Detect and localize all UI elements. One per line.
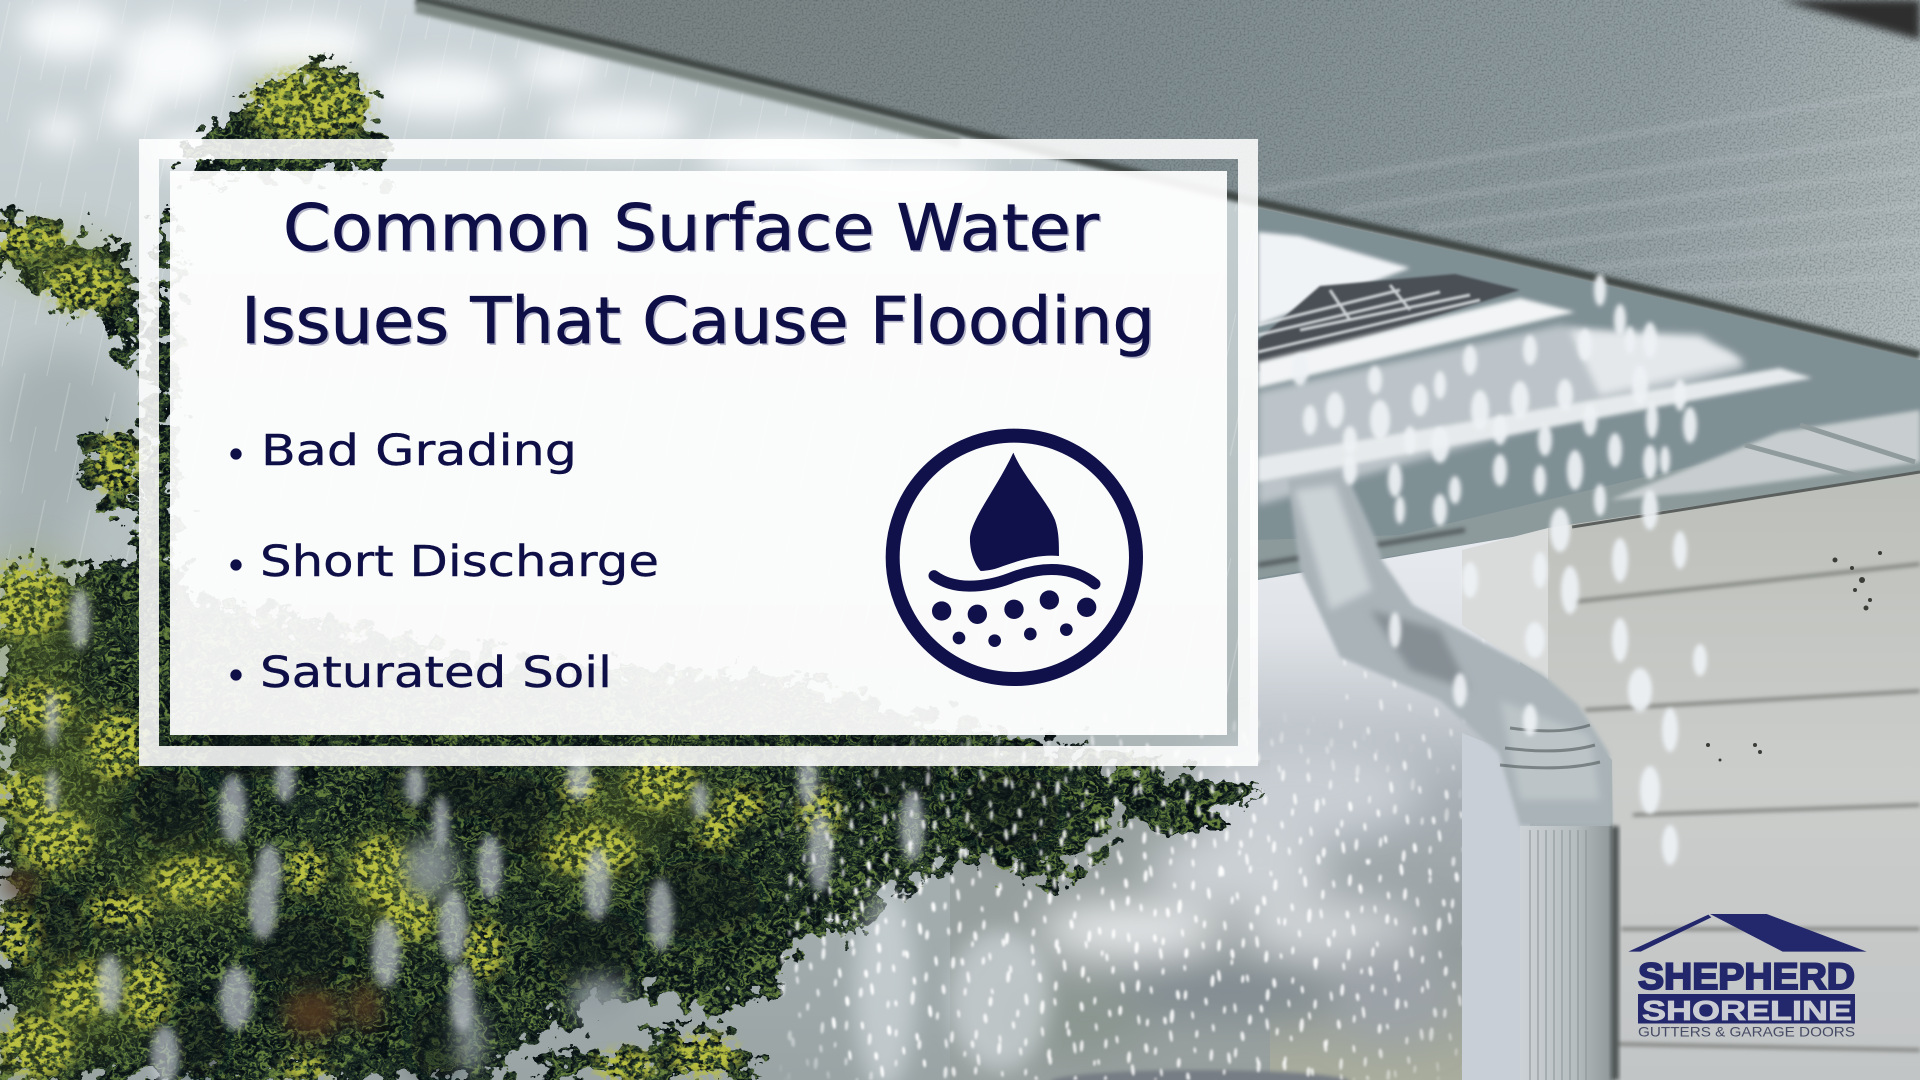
logo: Shepherd Shoreline Gutters & Garage Doors (1628, 914, 1867, 1040)
grey gaps and falling rain drops over the tree (46, 589, 924, 1080)
yard and distant mist below the gutter (950, 440, 1520, 1080)
logo wordmark (1638, 956, 1855, 1040)
icon: water drop over saturated soil (893, 436, 1136, 679)
inner translucent white panel (170, 171, 1227, 735)
bullet list (230, 426, 659, 698)
title: Common Surface Water (283, 192, 1100, 266)
bullet: bad grading: Bad Grading (261, 426, 577, 476)
title: Issues That Cause Flooding (241, 285, 1155, 359)
evergreen tree foliage (0, 50, 1265, 1080)
downspout elbow and pipe (1288, 470, 1619, 1080)
logo wordmark: SHORELINE (1642, 995, 1852, 1026)
water droplets bursting from the gutter (1292, 274, 1707, 865)
title (241, 192, 1157, 361)
dark shadows between the branches (36, 720, 1060, 1080)
bullet: saturated soil: Saturated Soil (260, 648, 612, 698)
title: Common Surface Water (285, 194, 1102, 268)
soffit under the roof overhang (412, 0, 1920, 360)
logo roof (1628, 914, 1867, 952)
water spray falling from the downspout (780, 630, 1540, 1080)
vinyl siding on the house (1548, 472, 1920, 1080)
white house wall near the downspout (1462, 528, 1548, 1080)
yellow-green foliage highlights (0, 69, 842, 1080)
logo wordmark: SHEPHERD (1638, 956, 1855, 997)
gutter, roof edge and lower soffit (1258, 208, 1920, 580)
outer translucent white frame (139, 139, 1258, 766)
title: Issues That Cause Flooding (243, 287, 1157, 361)
bullet: short discharge: Short Discharge (260, 537, 659, 587)
logo wordmark: GUTTERS & GARAGE DOORS (1638, 1024, 1855, 1040)
